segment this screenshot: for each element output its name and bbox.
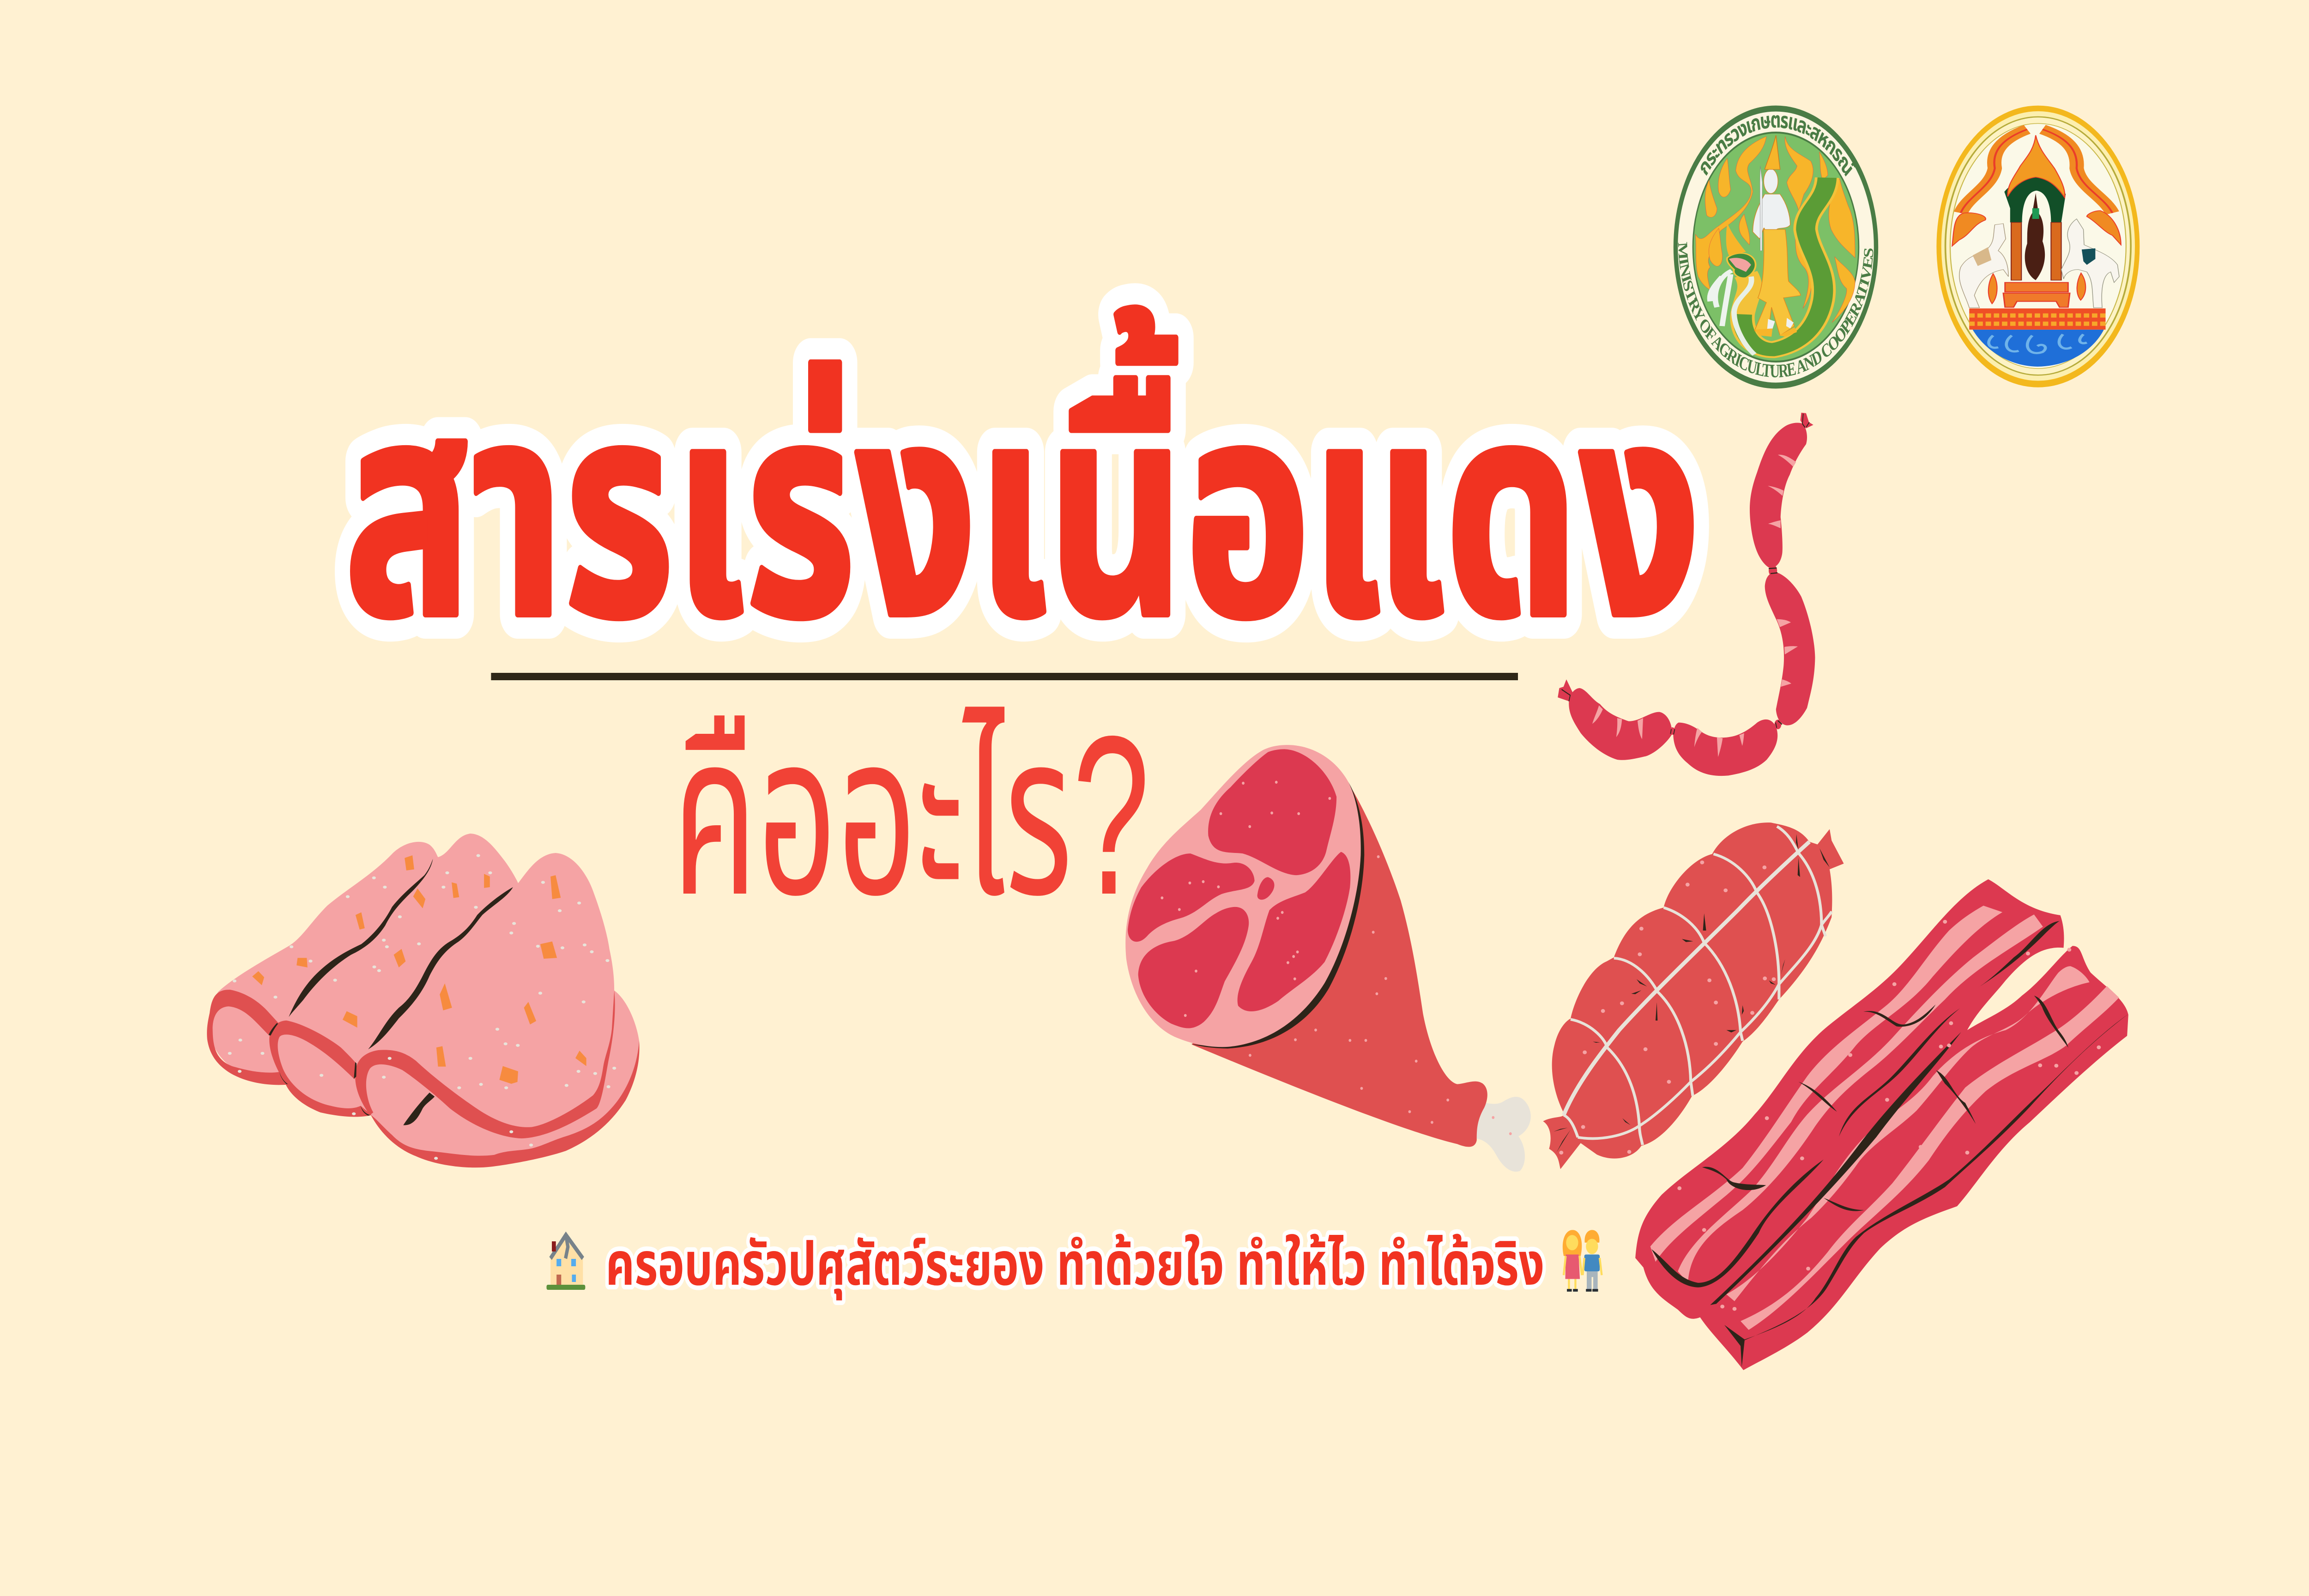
cow left bbox=[1959, 224, 2008, 308]
man shirt bbox=[1584, 1254, 1600, 1271]
seal English text arc bbox=[1678, 242, 1874, 377]
windows bbox=[556, 1259, 576, 1282]
woman face bbox=[1566, 1235, 1578, 1250]
water waves bbox=[1973, 330, 2104, 367]
logo: Ministry of Agriculture and Cooperatives seal bbox=[1675, 108, 1876, 386]
door bbox=[556, 1275, 561, 1285]
roll speckles bbox=[1561, 862, 1774, 1153]
throne pedestal bbox=[2003, 283, 2070, 307]
man arms bbox=[1583, 1258, 1602, 1275]
ham dark crescent bbox=[1191, 782, 1364, 1048]
tagline text: ครอบครัวปศุสัตว์ระยอง ทำด้วยใจ ทำให้ไว ทำได้จริง bbox=[605, 1231, 1544, 1300]
logo: Ministry of Agriculture and Cooperatives seal: MINISTRY OF AGRICULTURE AND COOPERATIVES bbox=[1675, 242, 1876, 381]
seal Thai text arc bbox=[1706, 127, 1846, 177]
icon: couple holding hands bbox=[1563, 1230, 1602, 1292]
roll twine bbox=[1564, 827, 1831, 1145]
divider line under title bbox=[491, 673, 1518, 680]
naga crest bbox=[1726, 223, 1746, 255]
sausage pink wedges bbox=[1592, 455, 1798, 757]
naga head bbox=[1727, 253, 1756, 278]
illustration: ham leg bbox=[1125, 745, 1531, 1172]
ham speckles bbox=[1162, 782, 1511, 1134]
deity feet bbox=[1767, 318, 1794, 332]
house roof bbox=[550, 1235, 583, 1258]
seal ring and cream background bbox=[1675, 109, 1876, 386]
naga white belly bbox=[1734, 277, 1754, 354]
naga serpent body bbox=[1742, 178, 1827, 350]
olive thin ring bbox=[1946, 117, 2131, 375]
chimney bbox=[552, 1241, 556, 1251]
illustration: tied salami roll bbox=[1543, 822, 1844, 1169]
gold flames bbox=[1696, 136, 1855, 322]
flame scroll left bbox=[1961, 129, 2027, 213]
logo: Rayong provincial seal bbox=[1936, 106, 2140, 387]
house wall bbox=[550, 1234, 583, 1285]
flame scroll right bbox=[2043, 129, 2112, 213]
illustration: bacon strips bbox=[1635, 879, 2128, 1370]
central deity bbox=[2025, 193, 2045, 280]
ham outer body bbox=[1192, 780, 1487, 1147]
horse right bbox=[2061, 219, 2119, 308]
small flames bbox=[1989, 273, 2085, 304]
seal green inner disc bbox=[1693, 133, 1859, 362]
bacon dark creases bbox=[1651, 921, 2128, 1367]
tagline banner bbox=[546, 1230, 1602, 1300]
lawn bbox=[546, 1285, 585, 1290]
roll body bbox=[1543, 822, 1844, 1169]
mortadella pink body bbox=[211, 834, 639, 1160]
bacon fat stripes bbox=[1650, 906, 2119, 1330]
seal artwork: deity, naga and flames bbox=[1696, 135, 1855, 354]
woman limbs bbox=[1564, 1256, 1582, 1290]
man trousers bbox=[1587, 1271, 1598, 1290]
bacon body bbox=[1635, 879, 2128, 1370]
title: main heading: สารเร่งเนื้อแดง bbox=[344, 305, 1700, 677]
man hair bbox=[1584, 1230, 1599, 1243]
deity torso and arms bbox=[1753, 194, 1790, 239]
roll dark ticks bbox=[1553, 834, 1830, 1153]
deity head bbox=[1764, 169, 1778, 193]
water spray bbox=[1710, 271, 1732, 326]
icon: house with garden bbox=[546, 1234, 585, 1290]
man face bbox=[1586, 1239, 1598, 1254]
deity skirt bbox=[1754, 230, 1801, 336]
ham bone bbox=[1477, 1097, 1531, 1172]
mortadella speckles bbox=[230, 856, 614, 1158]
ham cut face bbox=[1125, 745, 1361, 1047]
deity crown bbox=[1765, 135, 1780, 169]
pale inner field bbox=[1950, 123, 2126, 369]
logo: Ministry of Agriculture and Cooperatives seal: กระทรวงเกษตรและสหกรณ์ bbox=[1695, 108, 1858, 181]
ham muscle sections bbox=[1128, 749, 1350, 1028]
cream ring bbox=[1941, 111, 2135, 381]
mortadella dark creases bbox=[269, 859, 513, 1125]
sausage dark knots bbox=[1562, 414, 1809, 734]
woman dress bbox=[1566, 1254, 1580, 1279]
woman hair bbox=[1563, 1230, 1582, 1256]
illustration: sliced mortadella bbox=[207, 834, 640, 1167]
shoes bbox=[1567, 1289, 1598, 1292]
mortadella red rims bbox=[207, 990, 640, 1167]
gold outer ring bbox=[1936, 106, 2140, 387]
illustration: sausage links bbox=[1558, 413, 1815, 776]
sausage segments bbox=[1558, 413, 1815, 776]
subtitle: คืออะไร? bbox=[672, 689, 1150, 942]
arch flame crown bbox=[2007, 135, 2065, 198]
mortadella orange fat pieces bbox=[252, 855, 586, 1084]
arch columns bbox=[2011, 223, 2061, 280]
title: main heading: สารเร่งเนื้อแดง bbox=[344, 305, 1700, 677]
orange beaded base bbox=[1969, 308, 2105, 330]
bacon speckles bbox=[1680, 922, 2099, 1309]
green arch bbox=[2004, 175, 2066, 223]
deity sword bbox=[1760, 166, 1762, 251]
